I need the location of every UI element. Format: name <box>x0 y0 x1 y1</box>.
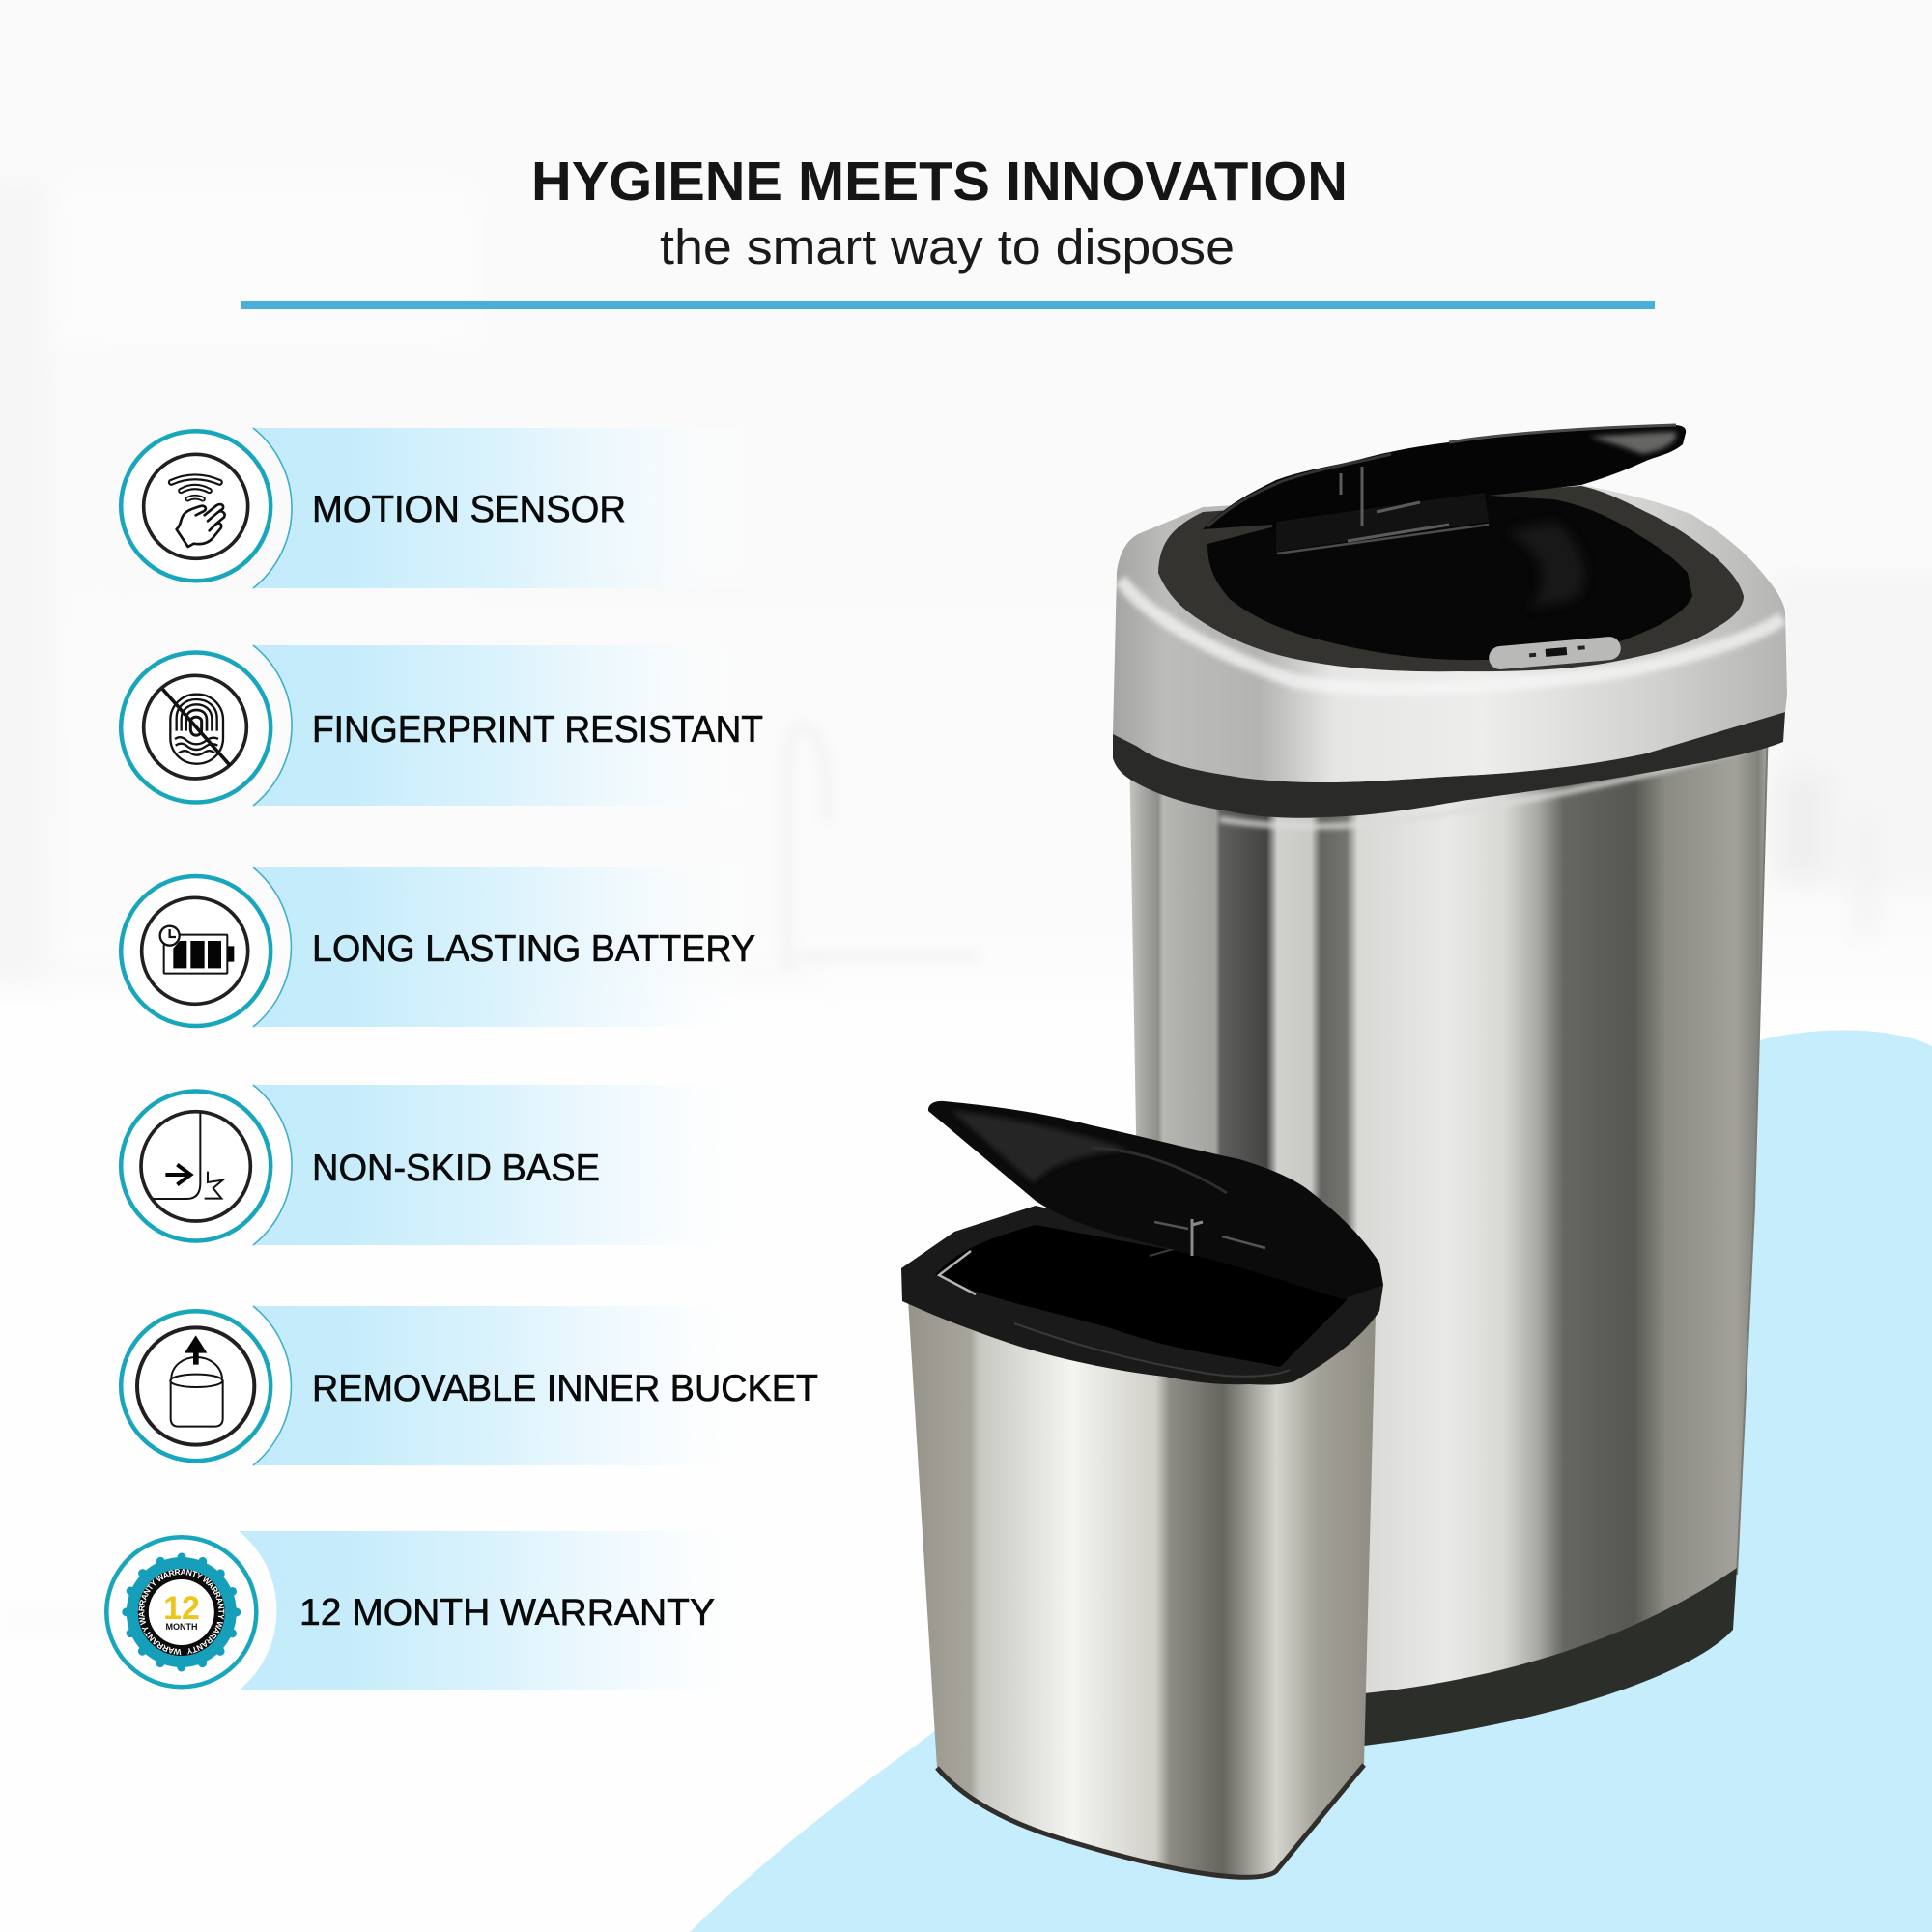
heading rule <box>241 301 1655 309</box>
label: NON-SKID BASE <box>312 1148 600 1189</box>
ribbon <box>253 1085 763 1245</box>
ribbon <box>253 867 763 1027</box>
light blue wave shape <box>690 1030 1932 1932</box>
icon: warranty seal: WARRANTY WARRANTY WARRANTY WARRANTY WARRANTY <box>138 1569 224 1656</box>
feature: long lasting battery <box>121 867 763 1027</box>
label: REMOVABLE INNER BUCKET <box>312 1368 818 1409</box>
body <box>1129 724 1768 1700</box>
ribbon <box>253 428 763 588</box>
inner silver rim <box>939 1251 976 1294</box>
opening rim <box>1158 486 1744 671</box>
icon: hand and waves <box>144 454 248 558</box>
open lid <box>928 1101 1383 1299</box>
badge ring <box>106 1537 256 1687</box>
icon: bucket lifting out <box>137 1327 254 1445</box>
feature: 12 month warranty <box>104 1531 715 1690</box>
icon: warranty seal <box>122 1553 242 1671</box>
lid sheen <box>1589 432 1676 454</box>
feature: removable inner bucket <box>121 1306 818 1465</box>
label: LONG LASTING BATTERY <box>312 928 755 970</box>
label: MOTION SENSOR <box>312 489 626 530</box>
lid hinge flap <box>1276 493 1489 552</box>
small stainless steel bin <box>901 1101 1383 1877</box>
ribbon <box>239 1531 753 1690</box>
light rim line <box>1219 746 1753 826</box>
badge ring <box>121 876 270 1026</box>
icon: warranty seal: 12 <box>163 1590 200 1627</box>
label: FINGERPRINT RESISTANT <box>312 709 763 751</box>
ribbon <box>253 645 763 806</box>
icon: warranty seal: MONTH <box>166 1622 197 1632</box>
icon: crossed fingerprint <box>144 675 246 779</box>
open lid <box>1203 425 1686 554</box>
ribbon <box>253 1306 763 1465</box>
collar <box>1113 485 1787 782</box>
lid sheen <box>952 1111 1130 1183</box>
opening <box>935 1225 1348 1367</box>
feature: non-skid base <box>121 1085 763 1245</box>
badge ring <box>121 653 270 802</box>
subtitle: the smart way to dispose <box>660 219 1235 274</box>
badge ring <box>121 1311 270 1461</box>
rim highlight <box>1014 1323 1290 1377</box>
latch <box>1192 1219 1203 1256</box>
interior reflection <box>1507 522 1584 609</box>
control panel <box>1488 636 1622 670</box>
collar top highlight <box>1121 580 1782 689</box>
large stainless steel bin <box>1113 425 1787 1746</box>
base band <box>1364 1568 1737 1746</box>
body <box>908 1299 1376 1877</box>
base edge <box>937 1765 1364 1877</box>
feature: motion sensor <box>121 428 763 588</box>
label: 12 MONTH WARRANTY <box>299 1592 715 1634</box>
bin interior <box>1208 496 1692 660</box>
title: HYGIENE MEETS INNOVATION <box>531 151 1348 213</box>
icon: non-skid foot <box>141 1112 250 1221</box>
icon: battery with clock <box>142 897 248 1004</box>
feature: fingerprint resistant <box>121 645 763 806</box>
dark band <box>1113 712 1785 818</box>
badge ring <box>121 1092 270 1240</box>
rim <box>901 1206 1383 1385</box>
badge ring <box>121 431 270 581</box>
